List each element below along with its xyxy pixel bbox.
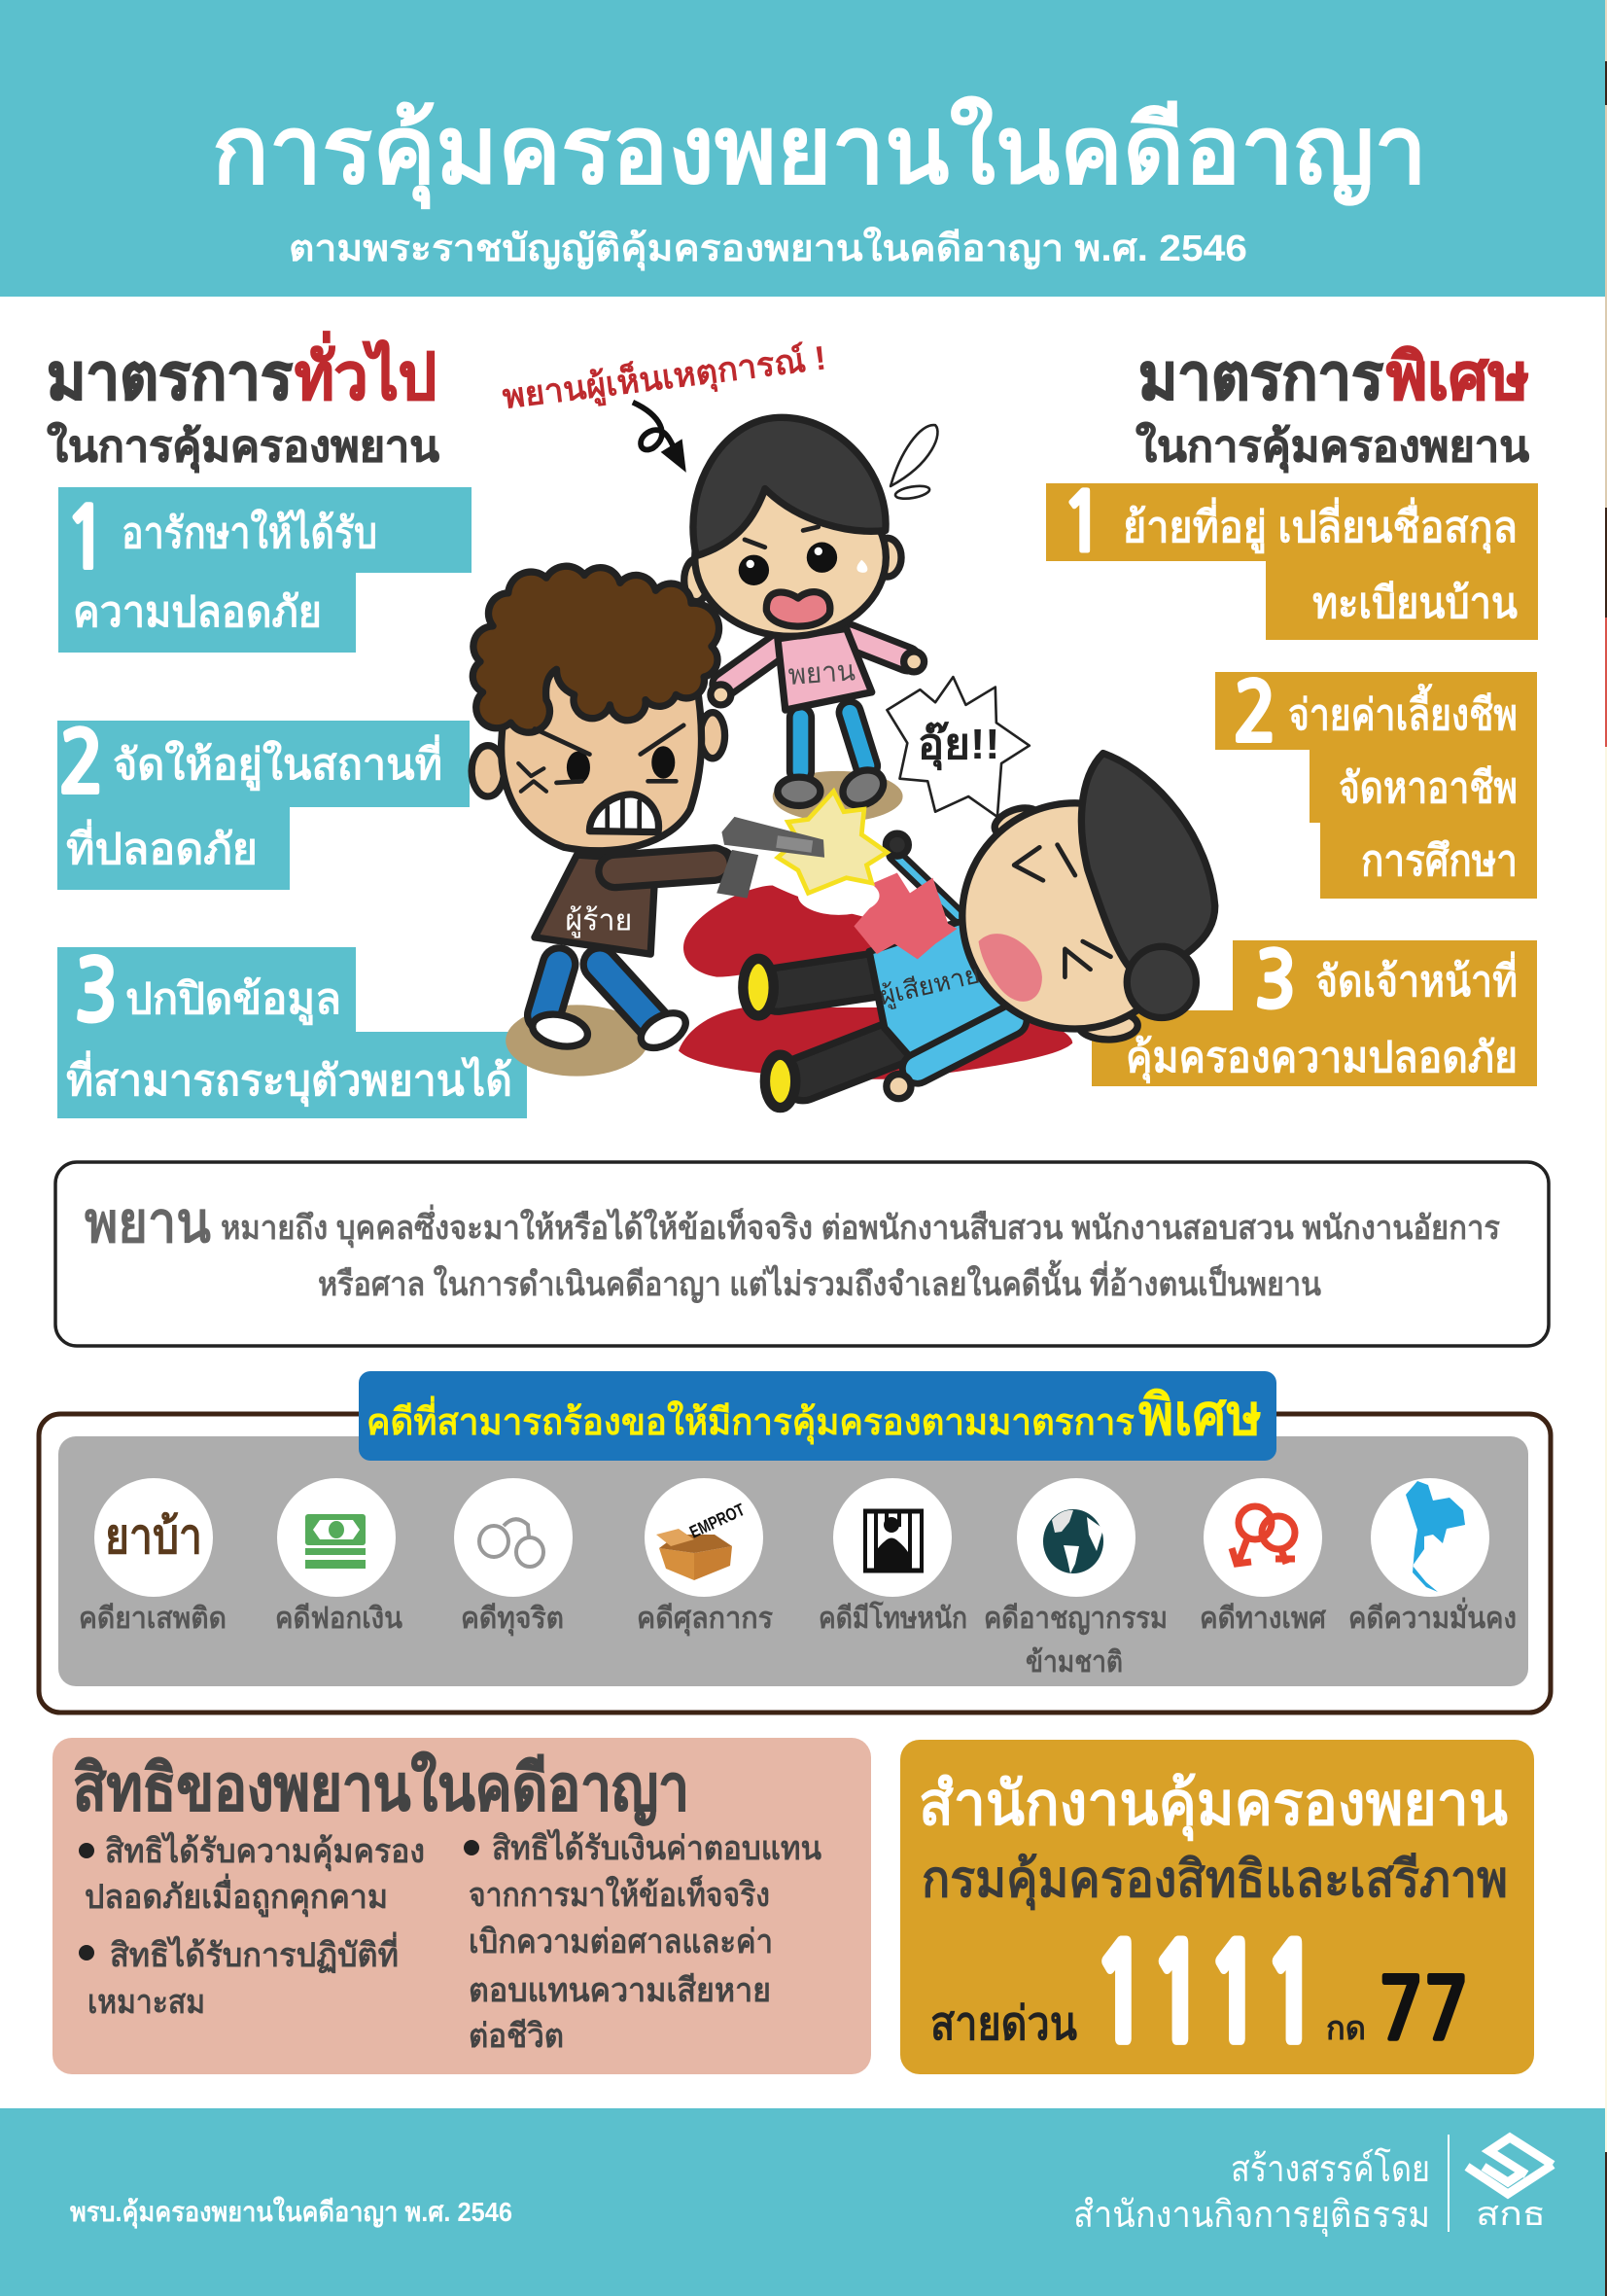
panel: general measure 3: ปกปิดข้อมูล [125,975,341,1025]
panel: special measure 2: จัดหาอาชีพ [1339,764,1518,812]
blood pools [679,886,1072,1079]
panel: special measure 3 [1092,940,1537,1086]
panel: special measure 2: จ่ายค่าเลี้ยงชีพ [1288,683,1518,739]
heading: special measures: มาตรการ [1138,340,1383,412]
panel: special measure 3: จัดเจ้าหน้าที่ [1315,951,1518,1006]
icon: customs box [645,1478,763,1597]
shirt label: witness: พยาน [787,654,856,691]
panel: hotline [900,1740,1534,2074]
heading: special measures: พิเศษ [1386,340,1529,412]
panel: hotline: 1111 [1093,1930,1320,2061]
panel: witness rights: เบิกความต่อศาลและค่า [469,1924,773,1960]
panel: witness rights: สิทธิได้รับความคุ้มครอง [105,1831,425,1872]
panel: general measure 2: 2 [58,722,105,806]
panel: hotline: สายด่วน [930,1998,1077,2050]
banner heading [359,1371,1276,1461]
definition box [55,1162,1549,1346]
label: transnational crime: คดีอาชญากรรม [984,1603,1168,1636]
character: attacker [472,566,733,1055]
panel: witness rights: เหมาะสม [87,1984,205,2021]
definition box: หมายถึง บุคคลซึ่งจะมาให้หรือได้ให้ข้อเท็จจริง ต่อพนักงานสืบสวน พนักงานสอบสวน พนักงานอัยการ [221,1204,1501,1249]
character: witness [684,417,937,813]
icon: globe [1017,1478,1135,1597]
heading: special measures [1135,340,1529,474]
panel: special measure 2: 2 [1233,672,1277,754]
heading: general measures [47,331,439,474]
panel: witness rights: สิทธิได้รับการปฏิบัติที่ [110,1931,399,1974]
icon: drugs: ยาบ้า [105,1509,202,1564]
icon: gender symbols [1204,1478,1322,1597]
credit: สร้างสรรค์โดย [1231,2147,1430,2190]
source note: พรบ.คุ้มครองพยานในคดีอาญา พ.ศ. 2546 [70,2196,512,2229]
panel: general measure 3: 3 [74,950,119,1035]
label: handcuffs: คดีทุจริต [461,1603,564,1637]
icon: squiggle arrow [633,403,686,473]
panel: general measure 2: จัดให้อยู่ในสถานที่ [113,734,442,791]
title: การคุ้มครองพยานในคดีอาญา [212,96,1427,210]
label: national security: คดีความมั่นคง [1348,1597,1517,1635]
heading: general measures: มาตรการ [47,340,293,412]
panel: general measure 3: ที่สามารถระบุตัวพยานได้ [66,1050,512,1108]
icon: handcuffs [454,1478,573,1597]
icon: drugs [94,1478,213,1597]
panel: hotline: สำนักงานคุ้มครองพยาน [919,1771,1508,1841]
gunshot flash [778,792,887,915]
definition box: หรือศาล ในการดำเนินคดีอาญา แต่ไม่รวมถึงจำเลยในคดีนั้น ที่อ้างตนเป็นพยาน [318,1259,1321,1304]
panel: special measure 1: 1 [1061,482,1105,564]
panel: general measure 1: ความปลอดภัย [73,588,322,636]
panel: witness rights: สิทธิได้รับเงินค่าตอบแทน [492,1828,821,1867]
speech burst: อุ๊ย!! [918,721,1000,771]
icon: gun [716,817,824,899]
illustration: crime scene [472,336,1215,1108]
label: transnational crime: ข้ามชาติ [1026,1646,1123,1678]
heading: general measures: ในการคุ้มครองพยาน [47,421,439,474]
panel: special measure 3: คุ้มครองความปลอดภัย [1126,1034,1518,1084]
definition box: พยาน [85,1191,211,1254]
subtitle: ตามพระราชบัญญัติคุ้มครองพยานในคดีอาญา พ.ศ. 2546 [289,227,1247,271]
witness caption: พยานผู้เห็นเหตุการณ์ ! [500,336,828,418]
icon: jail [833,1478,952,1597]
panel: special measure 1: ทะเบียนบ้าน [1312,580,1518,627]
credit: สำนักงานกิจการยุติธรรม [1073,2195,1430,2237]
icon: money [277,1478,396,1597]
panel: witness rights: สิทธิของพยานในคดีอาญา [73,1749,689,1825]
speech burst [887,677,1030,817]
panel: witness rights [52,1738,871,2074]
panel: general measure 2 [57,721,470,890]
heading: special measures: ในการคุ้มครองพยาน [1135,421,1529,474]
panel: special measure 1 [1046,482,1538,640]
shirt label: victim: ผู้เสียหาย [877,960,983,1011]
label: serious offence: คดีมีโทษหนัก [819,1600,967,1635]
panel: special measure 2: การศึกษา [1361,837,1518,885]
logo: สกธ [1476,2196,1546,2233]
panel: witness rights: จากการมาให้ข้อเท็จจริง [469,1874,770,1914]
banner heading: พิเศษ [1138,1384,1262,1447]
label: sexual offence: คดีทางเพศ [1200,1603,1327,1635]
footer band [0,2108,1607,2296]
label: transnational crime [984,1603,1168,1678]
panel: special measure 2 [1215,672,1537,899]
panel: hotline: กรมคุ้มครองสิทธิและเสรีภาพ [922,1852,1508,1911]
panel: witness rights: ตอบแทนความเสียหาย [469,1972,771,2009]
header banner [0,0,1607,297]
panel: general measure 1: อารักษาให้ได้รับ [122,508,377,557]
banner heading: คดีที่สามารถร้องขอให้มีการคุ้มครองตามมาตรการ [367,1395,1135,1445]
label: drugs: คดียาเสพติด [79,1603,227,1635]
credit [1073,2135,1450,2237]
character: victim [743,754,1215,1108]
panel: witness rights: ปลอดภัยเมื่อถูกคุกคาม [85,1873,388,1918]
panel: general measure 1 [58,487,472,653]
label: money: คดีฟอกเงิน [275,1603,402,1635]
panel: special measure 1: ย้ายที่อยู่ เปลี่ยนชื่อสกุล [1123,497,1518,554]
panel: general measure 1: 1 [64,497,109,582]
panel: general measure 2: ที่ปลอดภัย [66,819,258,873]
label: customs: คดีศุลกากร [637,1603,773,1637]
icon: customs box: EMPROT [686,1500,748,1542]
shirt label: attacker: ผู้ร้าย [565,905,632,938]
panel: witness rights: ต่อชีวิต [469,2018,564,2055]
panel: hotline: กด [1326,2010,1366,2047]
panel: special-measure case types [39,1371,1551,1713]
panel: general measure 3 [57,947,527,1118]
logo [1467,2137,1553,2233]
heading: general measures: ทั่วไป [295,331,437,412]
ground shadows [506,771,903,1077]
icon: map of Thailand [1371,1478,1489,1597]
panel: hotline: 77 [1379,1968,1469,2053]
panel: special measure 3: 3 [1254,942,1297,1019]
